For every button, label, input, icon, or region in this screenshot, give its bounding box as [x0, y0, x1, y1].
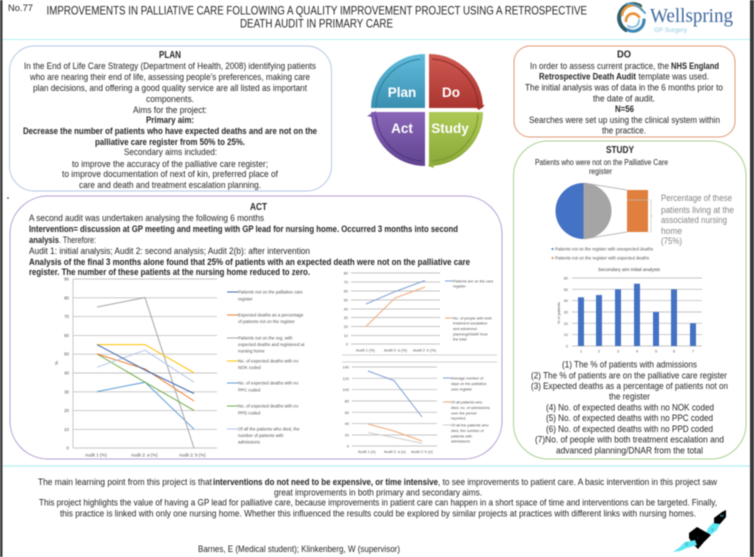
- legend: main chart: No. of expected deaths with no: [238, 358, 299, 364]
- logo: Wellspring GP Surgery: [619, 4, 733, 34]
- legend: main chart: nursing home: [238, 348, 265, 354]
- panel: do: [514, 46, 735, 137]
- legend: second chart: [445, 280, 493, 342]
- text: act body: [29, 213, 470, 277]
- text: study chart key: (5) No. of expected deaths with no PPC coded: [546, 413, 713, 423]
- line chart: register and escalation planning: Audit 2: a (%): [384, 348, 408, 352]
- text: act body: register. The number of these patients at the nursing home reduced to zero.: [29, 267, 310, 277]
- diagram: PDSA cycle: Study: [431, 121, 469, 136]
- text: plan body: who are nearing their end of life, assessing people’s preferences, making care: [29, 72, 310, 82]
- text: plan body: Decrease the number of patients who have expected deaths and are not on the: [23, 126, 317, 136]
- legend: third chart: died, the number of: [451, 429, 485, 433]
- legend: main chart: Of all the patients who died, the: [238, 426, 300, 432]
- line chart: days on register and admissions: 80: [345, 400, 349, 404]
- stray bullet: [7, 197, 9, 199]
- line chart: register and escalation planning: 60: [344, 290, 348, 294]
- bar chart: secondary aim initial analysis: 50: [564, 288, 568, 292]
- legend: third chart: over the period: [451, 412, 476, 416]
- legend: third chart: patients with: [451, 434, 472, 438]
- line chart: main audit measures: 60: [64, 333, 70, 338]
- legend: main chart: No. of expected deaths with no: [238, 380, 299, 386]
- icon: region map: Q: [685, 541, 688, 546]
- line chart: main audit measures: 20: [64, 408, 70, 413]
- bar chart: secondary aim initial analysis: 2: [598, 350, 600, 354]
- legend: pie chart: Patients not on the register with expected deaths: [555, 256, 649, 260]
- legend: second chart: planning/DNAR from: [453, 332, 488, 336]
- legend: third chart: admissions: [451, 440, 470, 444]
- text: plan body: [23, 61, 317, 190]
- bar chart: secondary aim initial analysis: Secondary aim initial analysis: [598, 267, 661, 272]
- bar chart: secondary aim initial analysis: 5: [655, 350, 657, 354]
- text: conclusion: interventions do not need to be expensive, or time intensive: [213, 477, 438, 487]
- text: act body: A second audit was undertaken analysing the following 6 months: [29, 213, 264, 223]
- text: study chart key: the register: [609, 392, 650, 402]
- legend: main chart: expected deaths and registered at: [238, 342, 305, 347]
- panel: act: [10, 196, 502, 459]
- quadrant: plan: [371, 54, 425, 108]
- pie-of-bar chart: Patients who were not on the Palliative Care: [535, 158, 668, 167]
- heading: act: ACT: [250, 201, 267, 213]
- text: study chart key: [531, 360, 728, 456]
- legend: second chart: No. of people with both: [453, 316, 492, 320]
- legend: second chart: and advanced: [453, 327, 477, 331]
- line chart: days on register and admissions: 140: [343, 366, 349, 370]
- line chart: register and escalation planning: [344, 272, 493, 352]
- text: conclusion: this practice is linked with only one nursing home. Whether this influenced the results could be explored by similar projects at practices with different links with nursing homes.: [60, 508, 696, 518]
- text: plan body: care and death and treatment escalation planning.: [79, 180, 261, 190]
- text: act body: . Therefore:: [59, 235, 96, 245]
- icon: swirl: [619, 4, 645, 31]
- text: do body: [525, 61, 723, 136]
- line chart: register and escalation planning: 30: [344, 316, 348, 320]
- bar chart: secondary aim initial analysis: [557, 267, 702, 354]
- panel: study: [514, 141, 746, 459]
- line chart: register and escalation planning: 80: [344, 272, 348, 276]
- legend: pie chart: [552, 246, 653, 260]
- legend: main chart: admissions: [238, 440, 261, 444]
- line chart: main audit measures: Audit 1 (%): [85, 452, 107, 458]
- legend: third chart: days on the palliative: [451, 382, 486, 386]
- text: do body: template was used.: [638, 72, 709, 82]
- bar chart: secondary aim initial analysis: 0: [566, 344, 568, 348]
- callout: nursing home percentage: (75%): [661, 236, 682, 246]
- legend: main chart: NOK coded: [238, 365, 261, 370]
- legend: main chart: No. of expected deaths with no: [238, 404, 299, 408]
- pie-of-bar chart: [535, 158, 734, 260]
- diagram: PDSA cycle: [367, 54, 485, 168]
- text: authors: Barnes, E (Medical student); Klinkenberg, W (supervisor): [198, 544, 400, 554]
- text: study chart key: (1) The % of patients with admissions: [562, 360, 697, 370]
- title: [46, 4, 587, 30]
- icon: region map: S: [711, 527, 714, 532]
- quadrant: do: [429, 54, 483, 108]
- line chart: days on register and admissions: Audit 2: a (n): [384, 450, 406, 454]
- bar chart: secondary aim initial analysis: 6: [673, 350, 675, 354]
- text: study chart key: (6) No. of expected deaths with no PPD coded: [546, 424, 713, 434]
- callout: nursing home percentage: home: [661, 226, 682, 236]
- legend: third chart: died, no. of admissions: [451, 406, 490, 410]
- line chart: register and escalation planning: 40: [344, 308, 348, 312]
- callout: nursing home percentage: associated nursing: [661, 215, 727, 225]
- line chart: days on register and admissions: Audit 1 (n): [358, 450, 376, 454]
- line chart: register and escalation planning: 20: [344, 325, 348, 329]
- text: plan body: components.: [146, 94, 194, 104]
- icon: region map: [673, 510, 726, 552]
- line chart: days on register and admissions: 0: [347, 444, 349, 448]
- bar chart: secondary aim initial analysis: 7: [692, 350, 694, 354]
- text: study chart key: (7)No. of people with both treatment escalation and: [535, 434, 724, 444]
- text: do body: NHS England: [671, 61, 719, 71]
- line chart: days on register and admissions: [343, 366, 490, 454]
- bar chart: secondary aim initial analysis: % of patients: [557, 302, 561, 324]
- title: IMPROVEMENTS IN PALLIATIVE CARE FOLLOWING A QUALITY IMPROVEMENT PROJECT USING A RETROSPECTIVE: [46, 4, 587, 18]
- legend: third chart: Of all the patients who: [451, 424, 489, 428]
- bar chart: secondary aim initial analysis: 60: [564, 276, 568, 280]
- line chart: main audit measures: Audit 2: a (%): [131, 452, 158, 458]
- text: plan body: palliative care register from 50% to 25%.: [95, 137, 245, 147]
- line chart: main audit measures: %: [54, 361, 59, 365]
- text: plan body: plan decisions, and offering a good quality service are all listed as important: [33, 83, 307, 93]
- text: conclusion: , to see improvements to patient care. A basic intervention in this project saw: [438, 477, 717, 487]
- text: plan body: to improve the accuracy of the palliative care register;: [72, 159, 268, 169]
- callout: nursing home percentage: [661, 193, 734, 246]
- text: act body: Intervention= discussion at GP meeting and meeting with GP lead for nursing home. Occurred 3 months into second: [29, 224, 458, 234]
- title: DEATH AUDIT IN PRIMARY CARE: [240, 18, 393, 30]
- line chart: register and escalation planning: 0: [346, 342, 348, 346]
- line chart: main audit measures: 50: [64, 352, 70, 357]
- callout: nursing home percentage: Percentage of these: [661, 193, 732, 203]
- arrows around the cycle: [367, 54, 485, 168]
- line chart: days on register and admissions: 60: [345, 411, 349, 415]
- text: study chart key: (4) No. of expected deaths with no NOK coded: [546, 402, 714, 412]
- text: do body: N=56: [615, 104, 634, 114]
- text: act body: Audit 1: initial analysis; Audit 2: second analysis; Audit 2(b): after intervention: [29, 246, 310, 256]
- text: do body: In order to assess current practice, the: [530, 61, 669, 71]
- text: study chart key: (3) Expected deaths as a percentage of patients not on: [531, 381, 728, 391]
- text: plan body: In the End of Life Care Strategy (Department of Health, 2008) identifying patients: [24, 61, 316, 71]
- text: plan body: Primary aim:: [146, 115, 194, 125]
- legend: main chart: number of patients with: [238, 433, 284, 438]
- legend: main chart: PPD coded: [238, 410, 261, 416]
- legend: main chart: of patients not on the register: [238, 319, 295, 324]
- line chart: register and escalation planning: 70: [344, 280, 348, 284]
- text: conclusion: The main learning point from this project is that: [38, 477, 212, 487]
- diagram: PDSA cycle: Do: [442, 85, 460, 100]
- line chart: main audit measures: 80: [64, 295, 70, 300]
- quadrant: study: [429, 112, 483, 166]
- icon: region map: I: [697, 535, 698, 540]
- text: plan body: Aims for the project:: [133, 105, 207, 115]
- bar chart: secondary aim initial analysis: 1: [580, 350, 582, 354]
- bar chart: secondary aim initial analysis: 10: [564, 333, 568, 337]
- text: do body: Searches were set up using the clinical system within: [529, 115, 720, 125]
- text: do body: The initial analysis was of data in the 6 months prior to: [525, 82, 723, 92]
- line chart: days on register and admissions: 120: [343, 377, 349, 381]
- text: conclusion: [38, 477, 717, 518]
- heading: study: STUDY: [606, 144, 634, 156]
- text: conclusion: great improvements in both primary and secondary aims.: [274, 488, 482, 498]
- text: study chart key: (2) The % of patients are on the palliative care register: [531, 370, 727, 380]
- line chart: main audit measures: 30: [64, 389, 70, 394]
- text: plan body: to improve documentation of next of kin, preferred place of: [62, 169, 278, 179]
- callout: nursing home percentage: patients living at the: [661, 205, 734, 215]
- pie-of-bar chart: register: [589, 167, 612, 176]
- icon: region map: W: [720, 513, 724, 518]
- legend: third chart: reported,: [451, 416, 466, 420]
- text: do body: the date of audit.: [593, 94, 655, 104]
- bar chart: secondary aim initial analysis: 40: [564, 299, 568, 303]
- legend: second chart: the total: [453, 338, 467, 342]
- legend: second chart: treatment escalation: [453, 322, 487, 326]
- legend: main chart: PPC coded: [238, 388, 261, 392]
- text: plan body: Secondary aims included:: [124, 147, 217, 157]
- legend: main chart: Expected deaths as a percentage: [238, 312, 304, 318]
- line chart: register and escalation planning: 10: [344, 334, 348, 338]
- bar chart: secondary aim initial analysis: 3: [617, 350, 619, 354]
- line chart: register and escalation planning: Audit 2: b (%): [413, 348, 437, 352]
- legend: main chart: register: [238, 296, 253, 302]
- legend: third chart: [443, 376, 490, 444]
- line chart: days on register and admissions: 100: [343, 388, 349, 392]
- line chart: days on register and admissions: 40: [345, 422, 349, 426]
- legend: main chart: [227, 290, 305, 444]
- bar chart: secondary aim initial analysis: 20: [564, 322, 568, 326]
- bar chart: secondary aim initial analysis: 4: [636, 350, 638, 354]
- line chart: days on register and admissions: Audit 2: b (n): [411, 450, 433, 454]
- line chart: main audit measures: 70: [64, 314, 70, 319]
- line chart: days on register and admissions: 20: [345, 434, 349, 438]
- bar chart: secondary aim initial analysis: 30: [564, 310, 568, 314]
- text: do body: the practice.: [602, 126, 646, 136]
- quadrant: act: [371, 112, 425, 166]
- legend: pie chart: Patients not on the register with unexpected deaths: [555, 246, 653, 252]
- heading: do: DO: [617, 48, 631, 60]
- line chart: main audit measures: Audit 2: b (%): [179, 452, 206, 458]
- legend: second chart: register.: [453, 284, 467, 288]
- legend: main chart: Patients not on the palliative care: [238, 290, 303, 294]
- line chart: main audit measures: 90: [64, 276, 70, 282]
- text: study chart key: advanced planning/DNAR from the total: [556, 446, 703, 456]
- legend: main chart: Patients not on the reg, with: [238, 336, 293, 340]
- legend: second chart: Patients are on the care: [453, 280, 493, 284]
- line chart: main audit measures: 10: [64, 427, 70, 432]
- text: do body: Retrospective Death Audit: [539, 72, 636, 82]
- text: act body: analysis: [29, 235, 59, 245]
- line chart: main audit measures: 40: [64, 370, 70, 376]
- text: act body: Analysis of the final 3 months alone found that 25% of patients with an expected death were not on the palliative care: [29, 257, 470, 267]
- legend: third chart: Of all patients who: [451, 400, 482, 404]
- line chart: register and escalation planning: Audit 1 (%): [356, 348, 376, 352]
- legend: third chart: care register: [451, 388, 473, 392]
- line chart: register and escalation planning: 50: [344, 298, 348, 302]
- legend: third chart: Average number of: [451, 376, 484, 380]
- heading: plan: PLAN: [159, 49, 181, 61]
- line chart: main audit measures: [54, 276, 305, 458]
- logo: Wellspring GP Surgery: Wellspring: [650, 6, 733, 27]
- diagram: PDSA cycle: Plan: [388, 85, 416, 100]
- line chart: main audit measures: 0: [67, 446, 70, 450]
- panel: plan: [10, 46, 332, 191]
- logo: Wellspring GP Surgery: GP Surgery: [654, 27, 688, 34]
- poster number: No.77: [8, 3, 33, 13]
- diagram: PDSA cycle: Act: [391, 121, 413, 136]
